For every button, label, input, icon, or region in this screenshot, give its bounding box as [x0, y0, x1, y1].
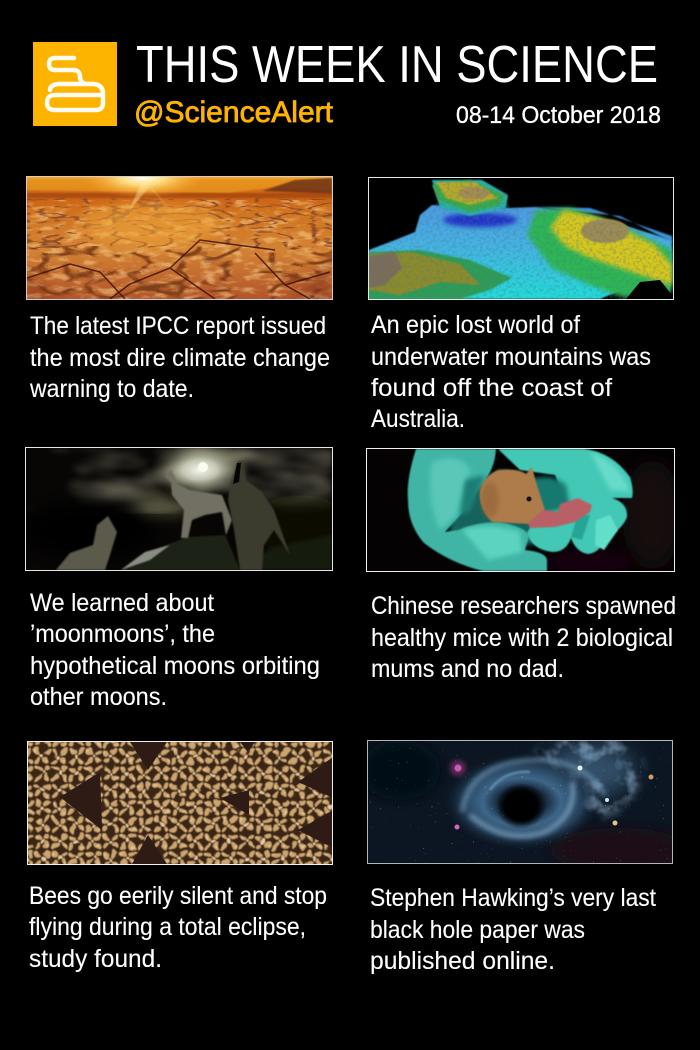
glove: left — [408, 449, 547, 571]
photo: cracked desert at sunset — [26, 176, 333, 300]
caption: flying during a total eclipse, — [29, 913, 306, 941]
caption: ’moonmoons’, the — [30, 620, 215, 648]
caption — [29, 882, 327, 973]
caption: The latest IPCC report issued — [30, 312, 326, 340]
caption: We learned about — [30, 589, 214, 617]
caption: Stephen Hawking’s very last — [370, 884, 656, 912]
caption: An epic lost world of — [371, 311, 580, 339]
caption: the most dire climate change — [30, 344, 330, 372]
pink babies — [528, 498, 592, 528]
caption: healthy mice with 2 biological — [371, 624, 673, 652]
wolf: right — [228, 461, 290, 570]
shadowed palm — [448, 468, 538, 548]
panel: underwater mountains — [368, 178, 674, 433]
caption — [371, 311, 651, 433]
handle: @ScienceAlert — [134, 96, 334, 129]
caption: published online. — [370, 947, 555, 975]
photo: wolves howling at moon — [20, 442, 350, 570]
caption: hypothetical moons orbiting — [30, 652, 320, 680]
photo: black hole in space — [367, 740, 673, 864]
caption: Australia. — [371, 405, 465, 433]
photo: seafloor bathymetry map — [368, 178, 674, 300]
caption: Bees go eerily silent and stop — [29, 882, 327, 910]
photo: mouse in gloved hands — [366, 448, 682, 576]
caption: underwater mountains was — [371, 343, 651, 371]
wolf: lower left — [56, 516, 117, 570]
caption: found off the coast of — [371, 374, 612, 402]
photo: bee kaleidoscope — [27, 741, 333, 865]
caption — [29, 312, 330, 403]
panel: moonmoons — [25, 447, 333, 705]
panel: mice — [366, 448, 682, 683]
glove: right — [498, 449, 633, 554]
caption: Chinese researchers spawned — [371, 592, 676, 620]
wolf: middle — [165, 469, 232, 538]
caption — [370, 884, 656, 975]
mouse — [480, 467, 545, 524]
panel: bees — [20, 734, 340, 973]
panel: climate report — [26, 158, 332, 403]
panel: black hole — [360, 740, 690, 975]
caption — [30, 589, 320, 711]
caption — [371, 592, 676, 683]
logo icon — [33, 42, 117, 126]
header — [33, 35, 661, 129]
caption: black hole paper was — [370, 916, 585, 944]
caption: study found. — [29, 945, 162, 973]
caption: mums and no dad. — [371, 655, 564, 683]
caption: warning to date. — [29, 375, 194, 403]
date: 08-14 October 2018 — [456, 102, 661, 129]
caption: other moons. — [30, 683, 167, 711]
